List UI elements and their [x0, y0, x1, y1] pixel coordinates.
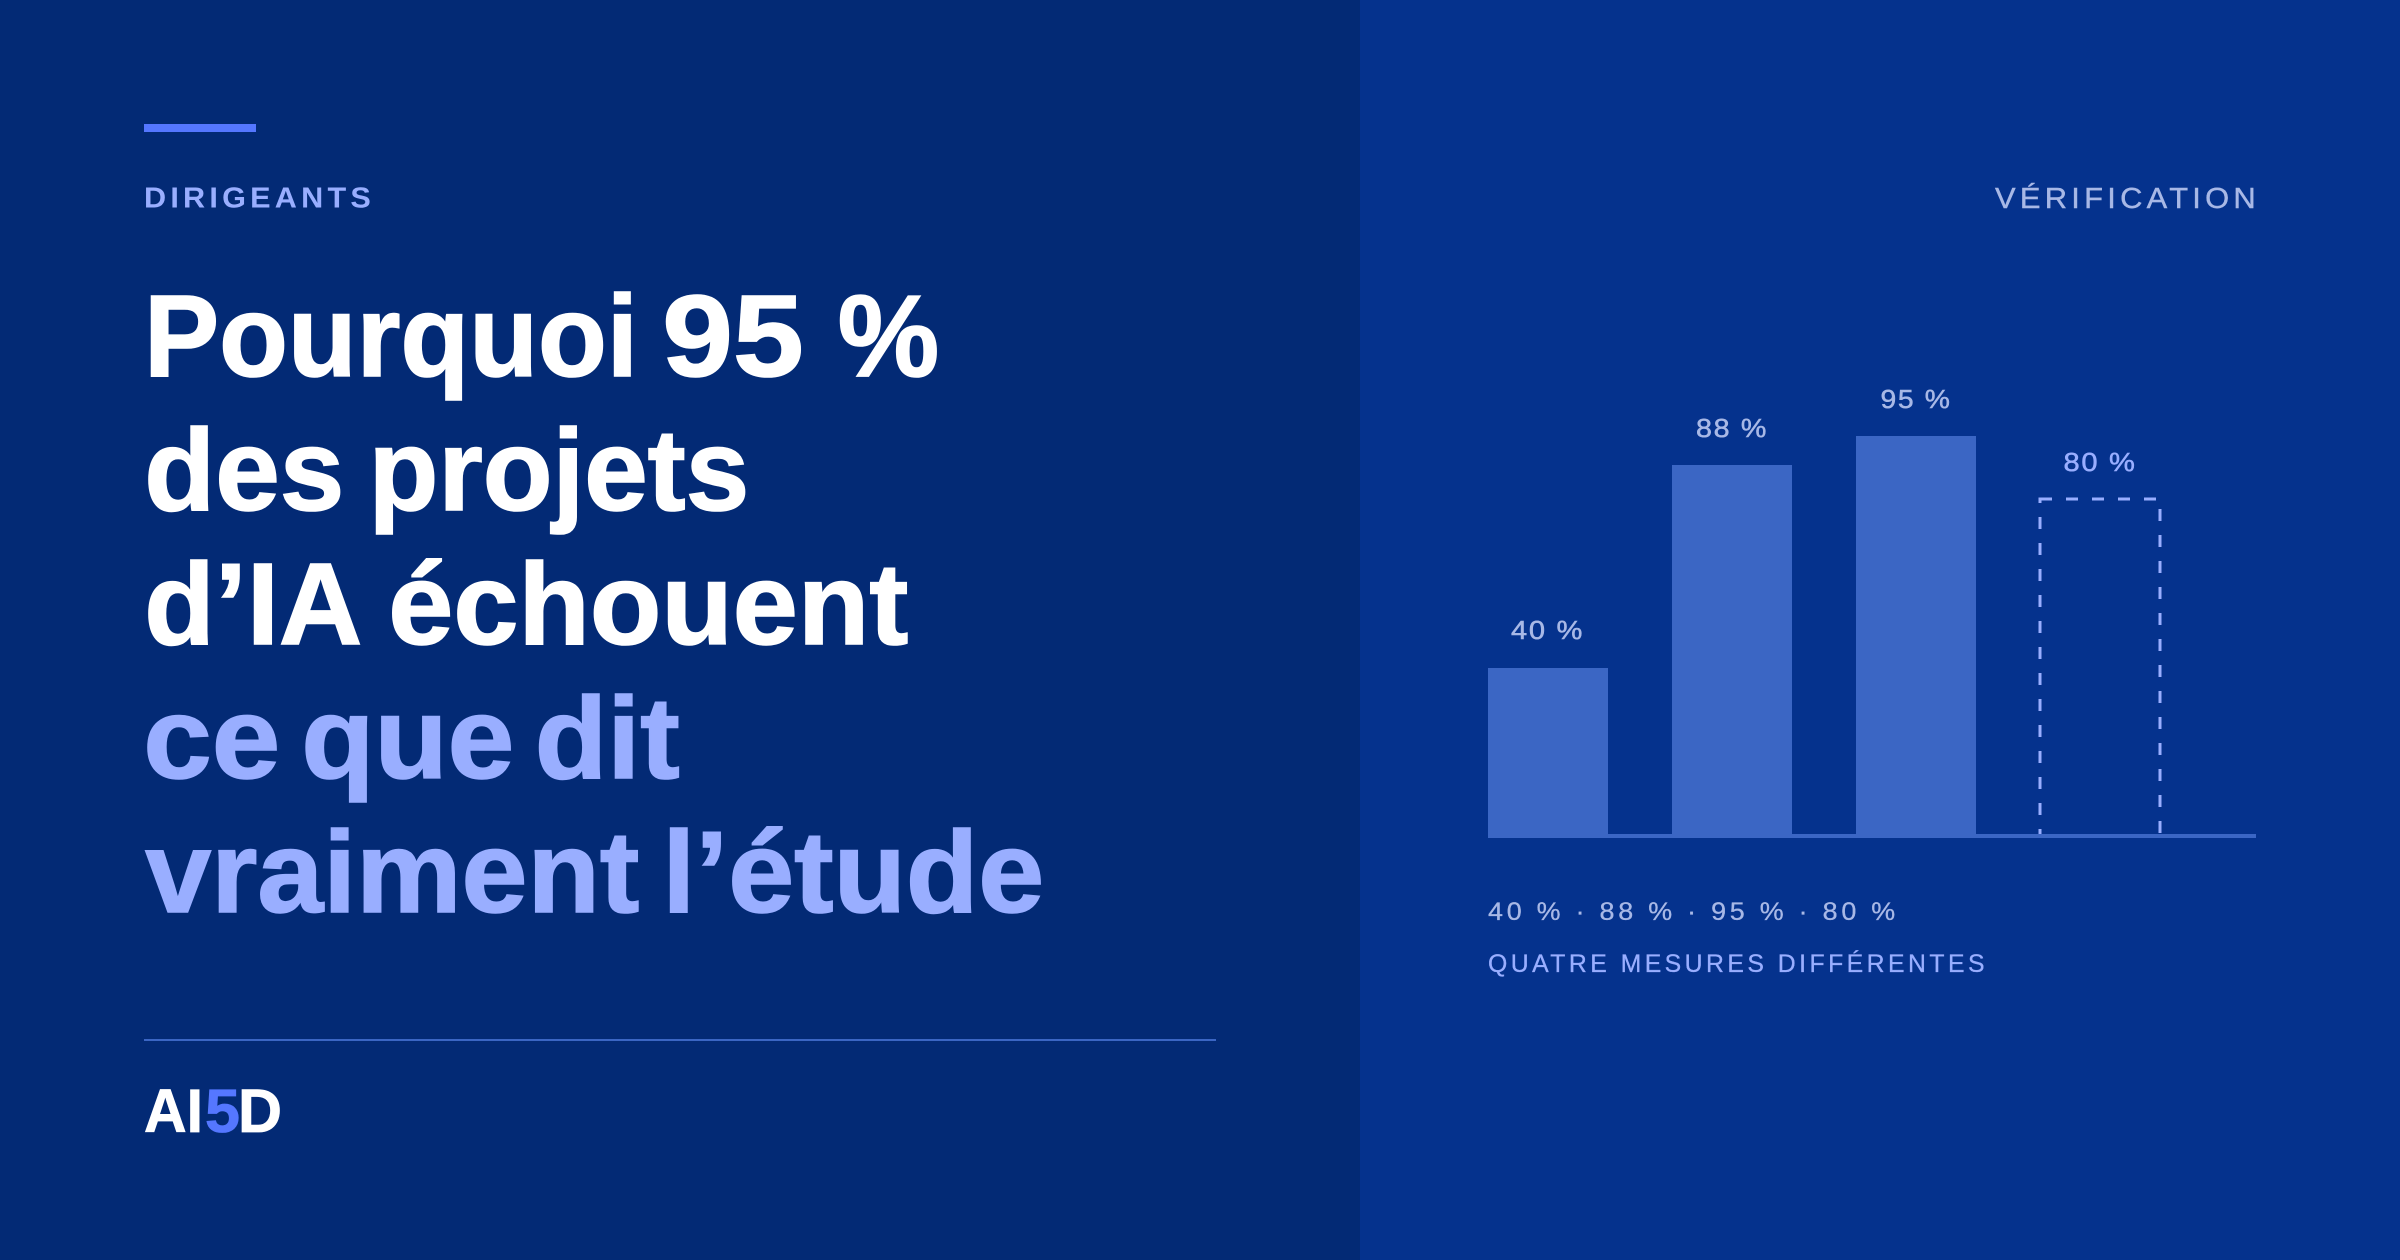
dashed bar: 80 %: [2040, 499, 2160, 836]
logo: AI5D: [144, 1077, 282, 1145]
title: [143, 271, 1044, 937]
eyebrow label: DIRIGEANTS: DIRIGEANTS: [144, 182, 375, 214]
title line 1: %: [838, 271, 939, 401]
panel: right chart background: [1360, 0, 2400, 1260]
bar chart: [1488, 384, 2256, 838]
logo letter D: D: [238, 1077, 282, 1145]
title line 1: Pourquoi: [144, 271, 638, 401]
title line 2: [144, 405, 749, 535]
title line 4 highlighted: ce: [143, 673, 280, 803]
title line 3: [144, 539, 908, 669]
bar: 40 %: [1488, 668, 1608, 838]
title line 3: d’IA: [144, 539, 362, 669]
value label: 40 %: 40 %: [1511, 615, 1584, 645]
title line 4 highlighted: dit: [535, 673, 680, 803]
bar: 95 %: [1856, 436, 1976, 838]
title line 3: échouent: [388, 539, 908, 669]
title line 1: 95: [662, 271, 804, 401]
panel label: VÉRIFICATION: VÉRIFICATION: [1995, 182, 2260, 215]
bar: 88 %: [1672, 465, 1792, 838]
caption: four different measures: QUATRE MESURES DIFFÉRENTES: [1488, 949, 1988, 978]
title line 1: [144, 271, 939, 401]
axis baseline: [1488, 834, 2256, 838]
title line 5 highlighted: vraiment: [145, 807, 639, 937]
title line 5 highlighted: [145, 807, 1044, 937]
logo digit 5: 5: [205, 1077, 240, 1145]
title line 2: des: [144, 405, 344, 535]
title line 4 highlighted: [143, 673, 680, 803]
caption: values list: 40 % · 88 % · 95 % · 80 %: [1488, 898, 1899, 926]
logo letters AI: AI: [144, 1077, 203, 1145]
value label: 88 %: 88 %: [1696, 413, 1768, 443]
value label: 95 %: 95 %: [1880, 384, 1952, 414]
value label: 80 %: 80 %: [2064, 447, 2136, 477]
title line 4 highlighted: que: [301, 673, 514, 803]
panel: left title background: [0, 0, 1360, 1260]
accent bar: [144, 124, 256, 132]
title line 5 highlighted: l’étude: [662, 807, 1044, 937]
title line 2: projets: [369, 405, 749, 535]
